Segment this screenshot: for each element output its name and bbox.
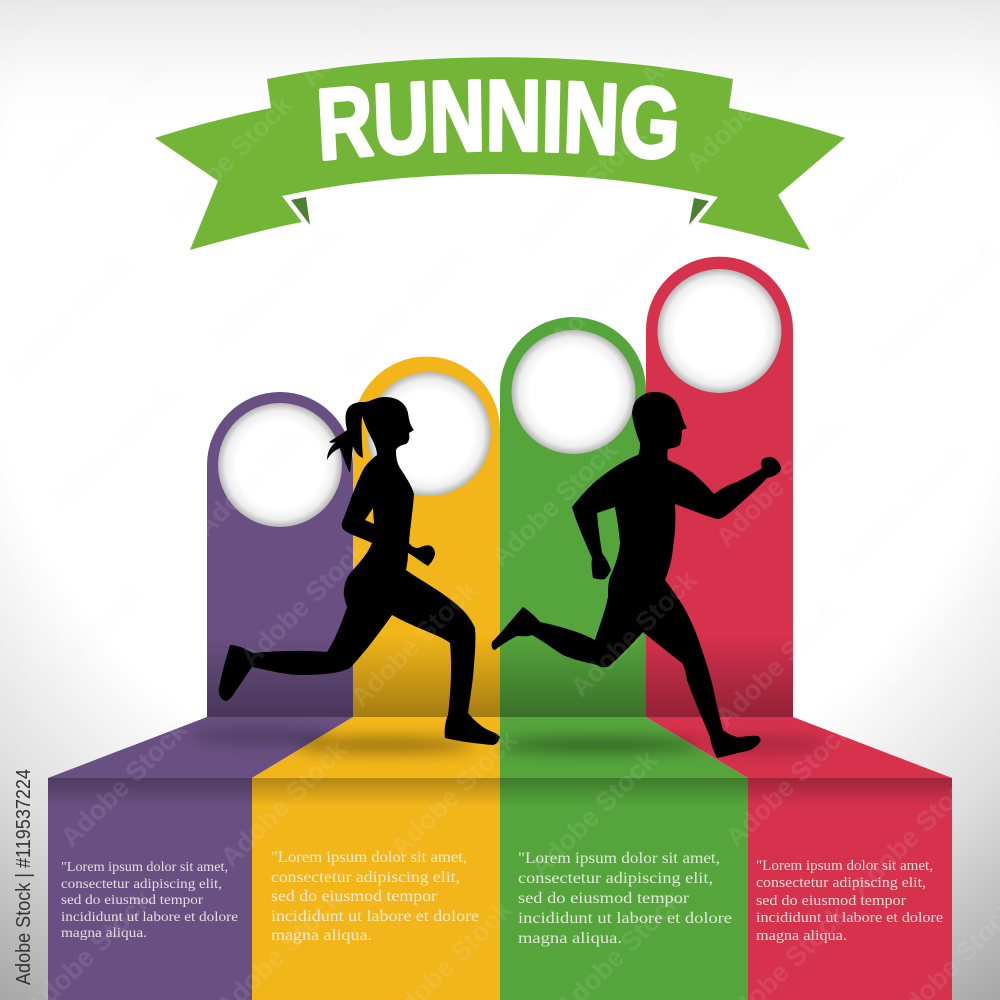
text block: green: consectetur adipiscing elit,	[518, 868, 713, 887]
watermark: Adobe Stock repeated: Adobe Stock	[190, 404, 328, 543]
text block: yellow: magna aliqua.	[271, 927, 372, 944]
banner: fold dark right	[689, 198, 709, 225]
icon: woman runner silhouette	[219, 397, 500, 745]
watermark: Adobe Stock repeated: Adobe Stock	[10, 579, 148, 718]
panel: red	[748, 778, 952, 1000]
text block: purple: consectetur adipiscing elit,	[61, 876, 222, 891]
text block: green	[518, 848, 732, 947]
banner: fold dark left	[291, 197, 310, 225]
floor shadows	[190, 729, 830, 752]
text block: red: magna aliqua.	[756, 928, 847, 944]
watermark: Adobe Stock repeated: Adobe Stock	[55, 714, 193, 853]
floor	[48, 717, 952, 778]
text block: purple	[61, 859, 238, 940]
panel: purple	[48, 778, 252, 1000]
watermark: Adobe Stock repeated: Adobe Stock	[825, 104, 963, 243]
text block: green: sed do eiusmod tempor	[518, 888, 690, 907]
circle: red column	[658, 269, 782, 393]
watermark: Adobe Stock repeated: Adobe Stock	[845, 764, 983, 903]
text block: yellow: "Lorem ipsum dolor sit amet,	[271, 849, 467, 866]
column: green	[500, 317, 646, 717]
watermark: Adobe Stock repeated: Adobe Stock	[205, 219, 343, 358]
text block: red: "Lorem ipsum dolor sit amet,	[756, 858, 933, 874]
text block: yellow: sed do eiusmod tempor	[271, 888, 438, 905]
watermark: Adobe Stock repeated: Adobe Stock	[720, 714, 858, 853]
text block: red: sed do eiusmod tempor	[756, 893, 906, 909]
text block: purple: magna aliqua.	[61, 925, 147, 940]
panel top shading	[48, 778, 952, 806]
watermark: Adobe Stock repeated: Adobe Stock	[45, 379, 183, 518]
circle: yellow column	[367, 372, 491, 496]
front panels	[48, 778, 952, 1000]
column: red	[646, 257, 793, 717]
watermark: Adobe Stock repeated: Adobe Stock	[525, 744, 663, 883]
columns chart	[207, 257, 793, 717]
panel: green	[500, 778, 748, 1000]
watermark: Adobe Stock repeated: Adobe Stock	[385, 724, 523, 863]
watermark: Adobe Stock repeated: Adobe Stock	[345, 574, 483, 713]
watermark: Adobe Stock repeated: Adobe Stock	[485, 434, 623, 573]
panel: yellow	[252, 778, 500, 1000]
text block: green: magna aliqua.	[518, 928, 622, 947]
text block: purple: "Lorem ipsum dolor sit amet,	[61, 859, 228, 874]
text block: purple: incididunt ut labore et dolore	[61, 909, 238, 924]
text block: green: "Lorem ipsum dolor sit amet,	[518, 848, 720, 867]
column: yellow	[353, 356, 500, 717]
column shading	[207, 635, 793, 717]
text block: green: incididunt ut labore et dolore	[518, 908, 732, 927]
watermark: Adobe Stock repeated: Adobe Stock	[235, 534, 373, 673]
text block: red: consectetur adipiscing elit,	[756, 875, 926, 891]
circle: green column	[512, 330, 636, 454]
circle: purple column	[218, 403, 342, 527]
floor: red	[646, 717, 952, 778]
floor: green	[500, 717, 748, 778]
icon: man runner silhouette	[492, 392, 781, 758]
text block: yellow: consectetur adipiscing elit,	[271, 869, 460, 886]
watermark: Adobe Stock repeated: Adobe Stock	[835, 439, 973, 578]
watermark: Adobe Stock repeated: Adobe Stock	[565, 564, 703, 703]
floor: yellow	[252, 717, 500, 778]
floor: purple	[48, 717, 353, 778]
text block: yellow: incididunt ut labore et dolore	[271, 908, 479, 925]
watermark: Adobe Stock repeated: Adobe Stock	[0, 249, 138, 388]
watermark: Adobe Stock repeated: Adobe Stock	[710, 414, 848, 553]
side credit text: Adobe Stock | #119537224	[12, 769, 35, 985]
watermark: Adobe Stock repeated: Adobe Stock	[680, 39, 818, 178]
column: purple	[207, 392, 353, 717]
watermark: Adobe Stock repeated: Adobe Stock	[335, 239, 473, 378]
title: RUNNING	[318, 79, 677, 161]
watermark: Adobe Stock repeated: Adobe Stock	[710, 594, 848, 733]
text block: red: incididunt ut labore et dolore	[756, 910, 943, 926]
watermark: Adobe Stock repeated: Adobe Stock	[35, 49, 173, 188]
text block: yellow	[271, 849, 479, 944]
text block: red	[756, 858, 943, 944]
watermark: Adobe Stock repeated: Adobe Stock	[515, 119, 653, 258]
text block: purple: sed do eiusmod tempor	[61, 892, 203, 907]
watermark: Adobe Stock repeated: Adobe Stock	[545, 214, 683, 353]
watermark: Adobe Stock repeated: Adobe Stock	[160, 89, 298, 228]
banner	[155, 57, 845, 250]
banner: ribbon with tails	[155, 57, 845, 250]
watermark: Adobe Stock repeated: Adobe Stock	[215, 734, 353, 873]
